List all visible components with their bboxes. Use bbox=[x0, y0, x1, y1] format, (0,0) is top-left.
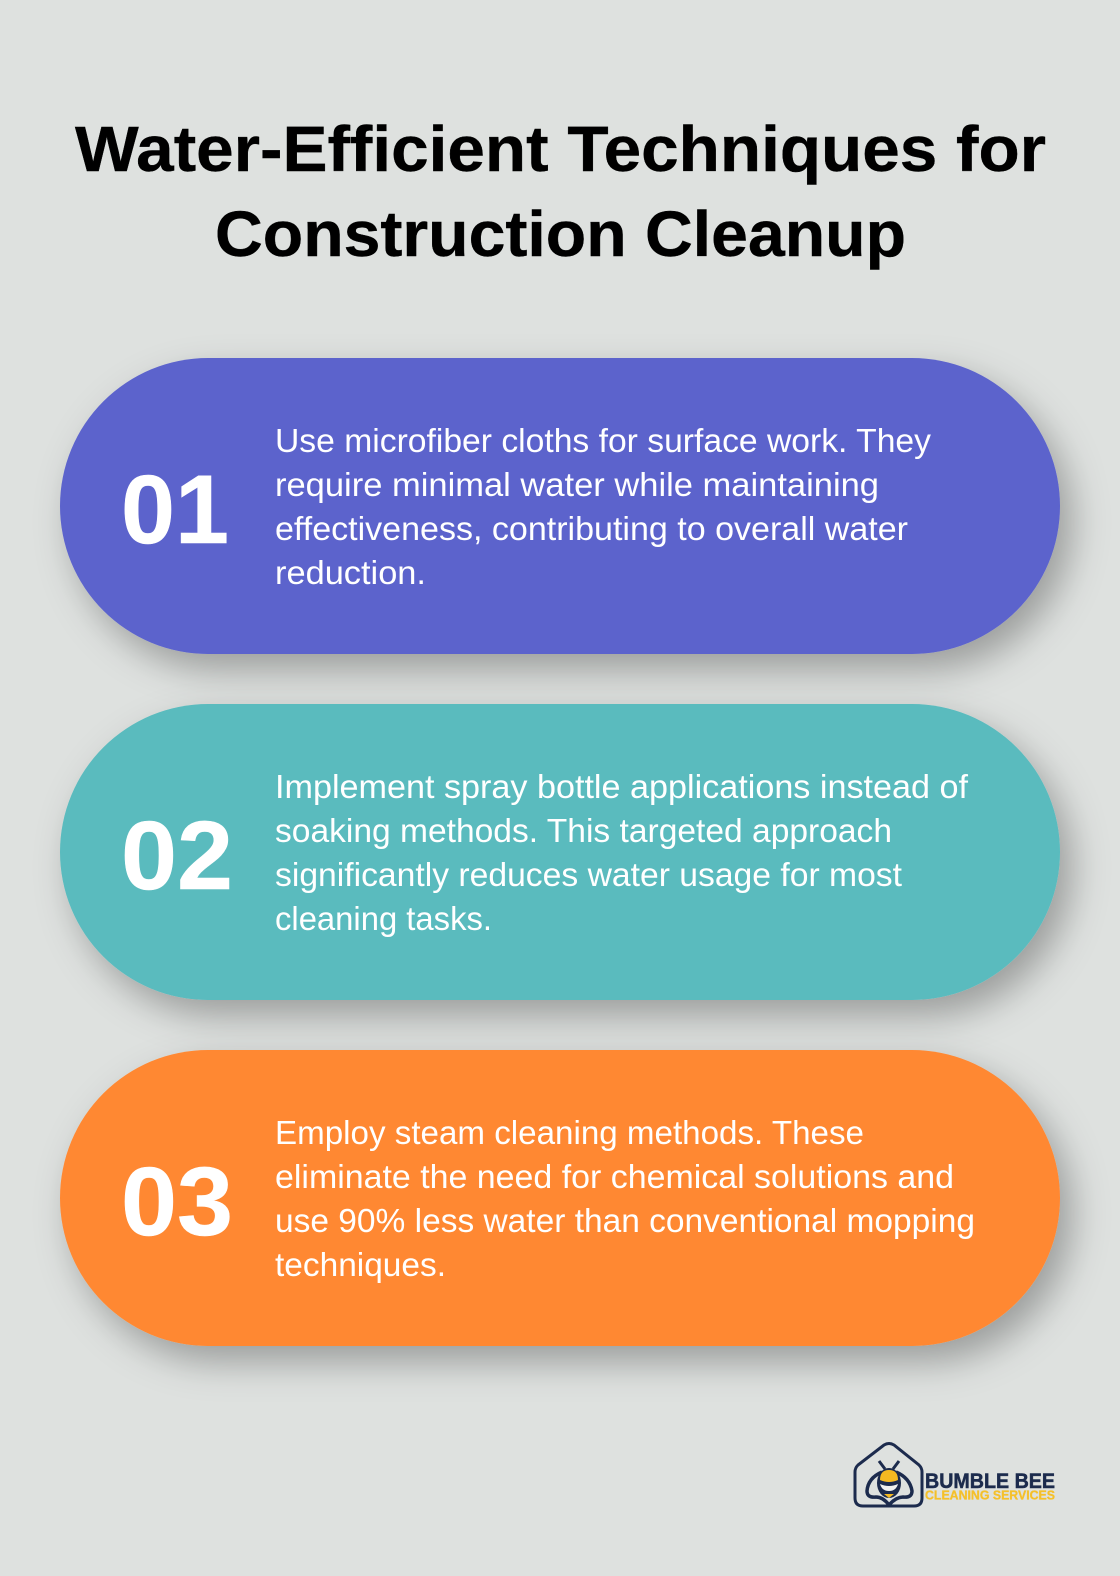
text block 02 bbox=[275, 768, 969, 937]
panel: step 02 bbox=[60, 704, 1060, 1000]
text block 03: techniques. bbox=[275, 1246, 446, 1283]
logo: Bumble Bee Cleaning Services bbox=[855, 1444, 1055, 1506]
icon: house with bee bbox=[855, 1444, 922, 1506]
pill background 03 bbox=[60, 1050, 1060, 1346]
title: Water-Efficient Techniques for bbox=[75, 113, 1046, 185]
text block 02: Implement spray bottle applications instead of bbox=[275, 768, 969, 805]
title bbox=[75, 113, 1046, 270]
pill background 01 bbox=[60, 358, 1060, 654]
text block 02: significantly reduces water usage for most bbox=[275, 856, 902, 893]
text block 03 bbox=[275, 1114, 975, 1283]
number 03: 03 bbox=[121, 1147, 233, 1256]
text block 02: soaking methods. This targeted approach bbox=[275, 812, 892, 849]
text block 01: Use microfiber cloths for surface work. They bbox=[275, 422, 931, 459]
number 01: 01 bbox=[121, 455, 229, 564]
panel: step 03 bbox=[60, 1050, 1060, 1346]
text block 03: use 90% less water than conventional mopping bbox=[275, 1202, 975, 1239]
text block 01: reduction. bbox=[275, 554, 426, 591]
text block 01: effectiveness, contributing to overall water bbox=[275, 510, 908, 547]
number 02: 02 bbox=[121, 801, 233, 910]
pill background 02 bbox=[60, 704, 1060, 1000]
panel: step 01 bbox=[60, 358, 1060, 654]
logo wordmark: BUMBLE BEE bbox=[925, 1470, 1055, 1493]
text block 02: cleaning tasks. bbox=[275, 900, 492, 937]
title: Construction Cleanup bbox=[215, 198, 906, 270]
text block 03: eliminate the need for chemical solutions and bbox=[275, 1158, 954, 1195]
text block 01: require minimal water while maintaining bbox=[275, 466, 879, 503]
logo tagline: CLEANING SERVICES bbox=[925, 1488, 1055, 1502]
text block 01 bbox=[275, 422, 931, 591]
text block 03: Employ steam cleaning methods. These bbox=[275, 1114, 864, 1151]
